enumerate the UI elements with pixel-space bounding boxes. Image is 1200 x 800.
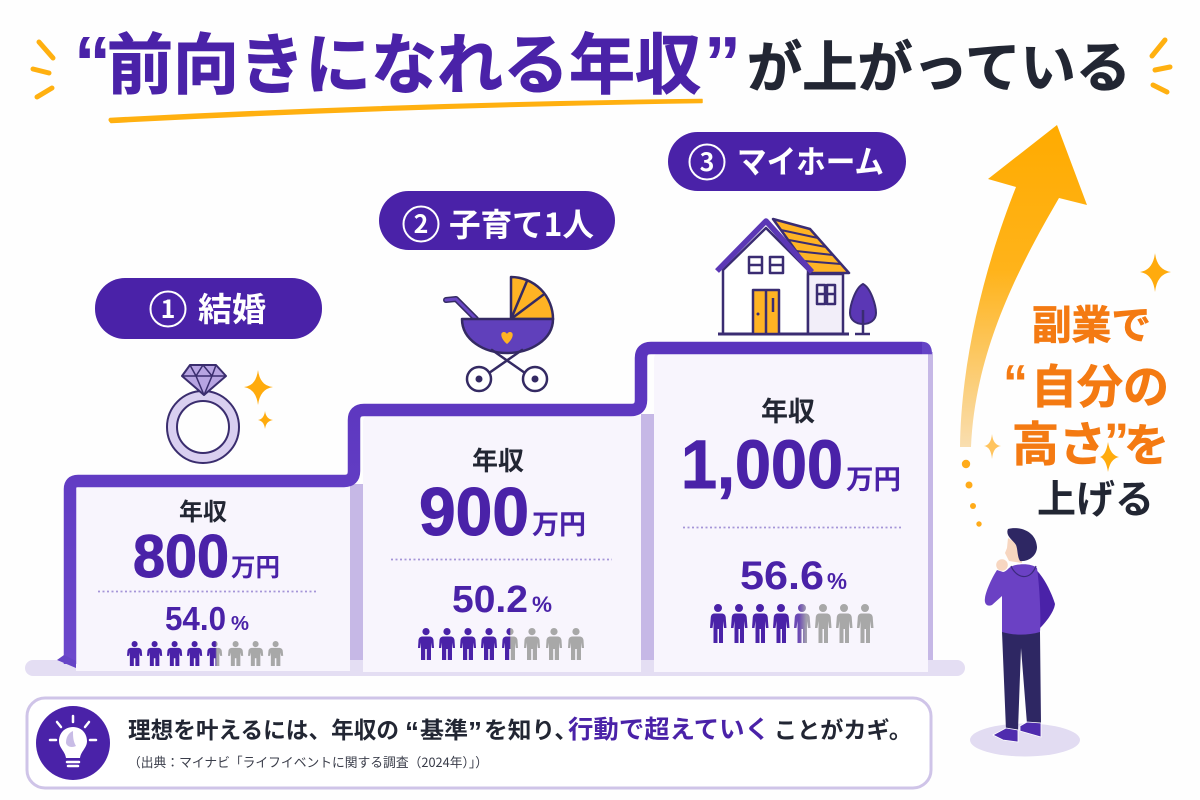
floor shadow [25,660,965,676]
stair band [70,348,922,664]
title highlight text: “ [74,21,111,104]
title dark text: が上がっている [747,23,1131,103]
people row: step 3 [710,604,874,643]
card: step 2 [363,416,641,672]
takeaway sentence: を知り、 [484,711,578,745]
callout: side message: を [1124,409,1169,474]
icon: stroller [446,277,553,391]
divider [98,590,316,592]
icon: left sparks [33,42,53,97]
pill: step 2 [379,191,615,250]
pill: step 3 [668,132,906,191]
face and hand [1005,538,1022,563]
takeaway sentence: 行動で超えていく [568,710,770,746]
pill: step 1: 1 [161,290,175,326]
step 3 share: 56.6 [740,554,824,598]
amount: 1,000 [681,426,843,503]
title highlight text: ” [704,21,741,104]
trousers [1002,632,1041,730]
callout: side message: 高さ [1012,406,1106,475]
step 3 salary [681,390,901,503]
title [74,12,1131,122]
label: annual income: 年収 [761,390,815,429]
person looking up [970,528,1080,756]
card: step 3 [654,353,928,672]
hair [1007,528,1037,561]
pill: step 2: 2 [414,205,428,241]
step 1 share: 54.0 [165,600,226,637]
pill: step 3: 3 [700,143,714,179]
icon: light bulb [36,706,110,780]
shoes [993,722,1041,742]
callout: side message: 上げる [1037,469,1154,525]
people row: step 1 [127,641,283,666]
pill: step 3: マイホーム [737,137,884,183]
source note: （出典：マイナビ「ライフイベントに関する調査（2024年）」） [128,752,488,771]
callout: side message: 副業で [1032,293,1151,351]
sparkle over text [1100,442,1119,472]
step 2 salary [419,441,586,550]
icon: house [717,219,849,334]
divider [683,526,902,528]
callout: side message [1003,293,1169,525]
callout: side message: “ [1003,355,1028,411]
takeaway sentence: “ [405,716,419,747]
step 2 share: 50.2 [452,579,528,621]
icon: diamond ring [167,365,239,463]
takeaway sentence: 理想を叶えるには、年収の [128,711,399,745]
pill: step 1 [95,278,322,339]
people row: step 2 [418,628,584,660]
title highlight text: 前向きになれる年収 [107,12,701,108]
icon: right sparks [1152,40,1170,92]
amount: 900 [419,474,529,550]
takeaway sentence: ” [468,716,482,747]
takeaway sentence: 基準 [420,711,468,745]
takeaway sentence [128,710,912,747]
ground shadow [970,724,1080,756]
icon: ring sparkles [244,370,273,429]
amount: 800 [133,523,229,590]
step 1 salary [133,492,280,590]
step 3 salary: 万円 [846,458,901,497]
sparkles: right [984,253,1171,459]
step side strips [350,352,933,660]
staircase [57,342,933,672]
label: annual income: 年収 [179,492,227,527]
card: step 1 [76,487,350,671]
dotted trail [962,460,982,527]
label: annual income: 年収 [472,441,524,478]
step 2 share: % [532,592,552,617]
title underline [109,100,702,122]
step 2 salary: 万円 [532,503,586,542]
step 3 share: % [827,568,847,594]
divider [391,558,612,560]
panel: takeaway [27,698,931,788]
takeaway sentence: ことがカギ。 [774,711,912,745]
callout: side message: 自分の [1031,351,1169,417]
step 1 share: % [231,613,249,635]
icon: tree [850,284,876,334]
step 1 salary: 万円 [231,548,280,584]
callout: side message: ” [1104,413,1129,469]
far arm [1030,568,1055,628]
hoodie [985,564,1040,635]
pill: step 2: 子育て1人 [449,200,594,246]
pill: step 1: 結婚 [198,283,266,331]
arrow: rising orange [960,125,1087,447]
